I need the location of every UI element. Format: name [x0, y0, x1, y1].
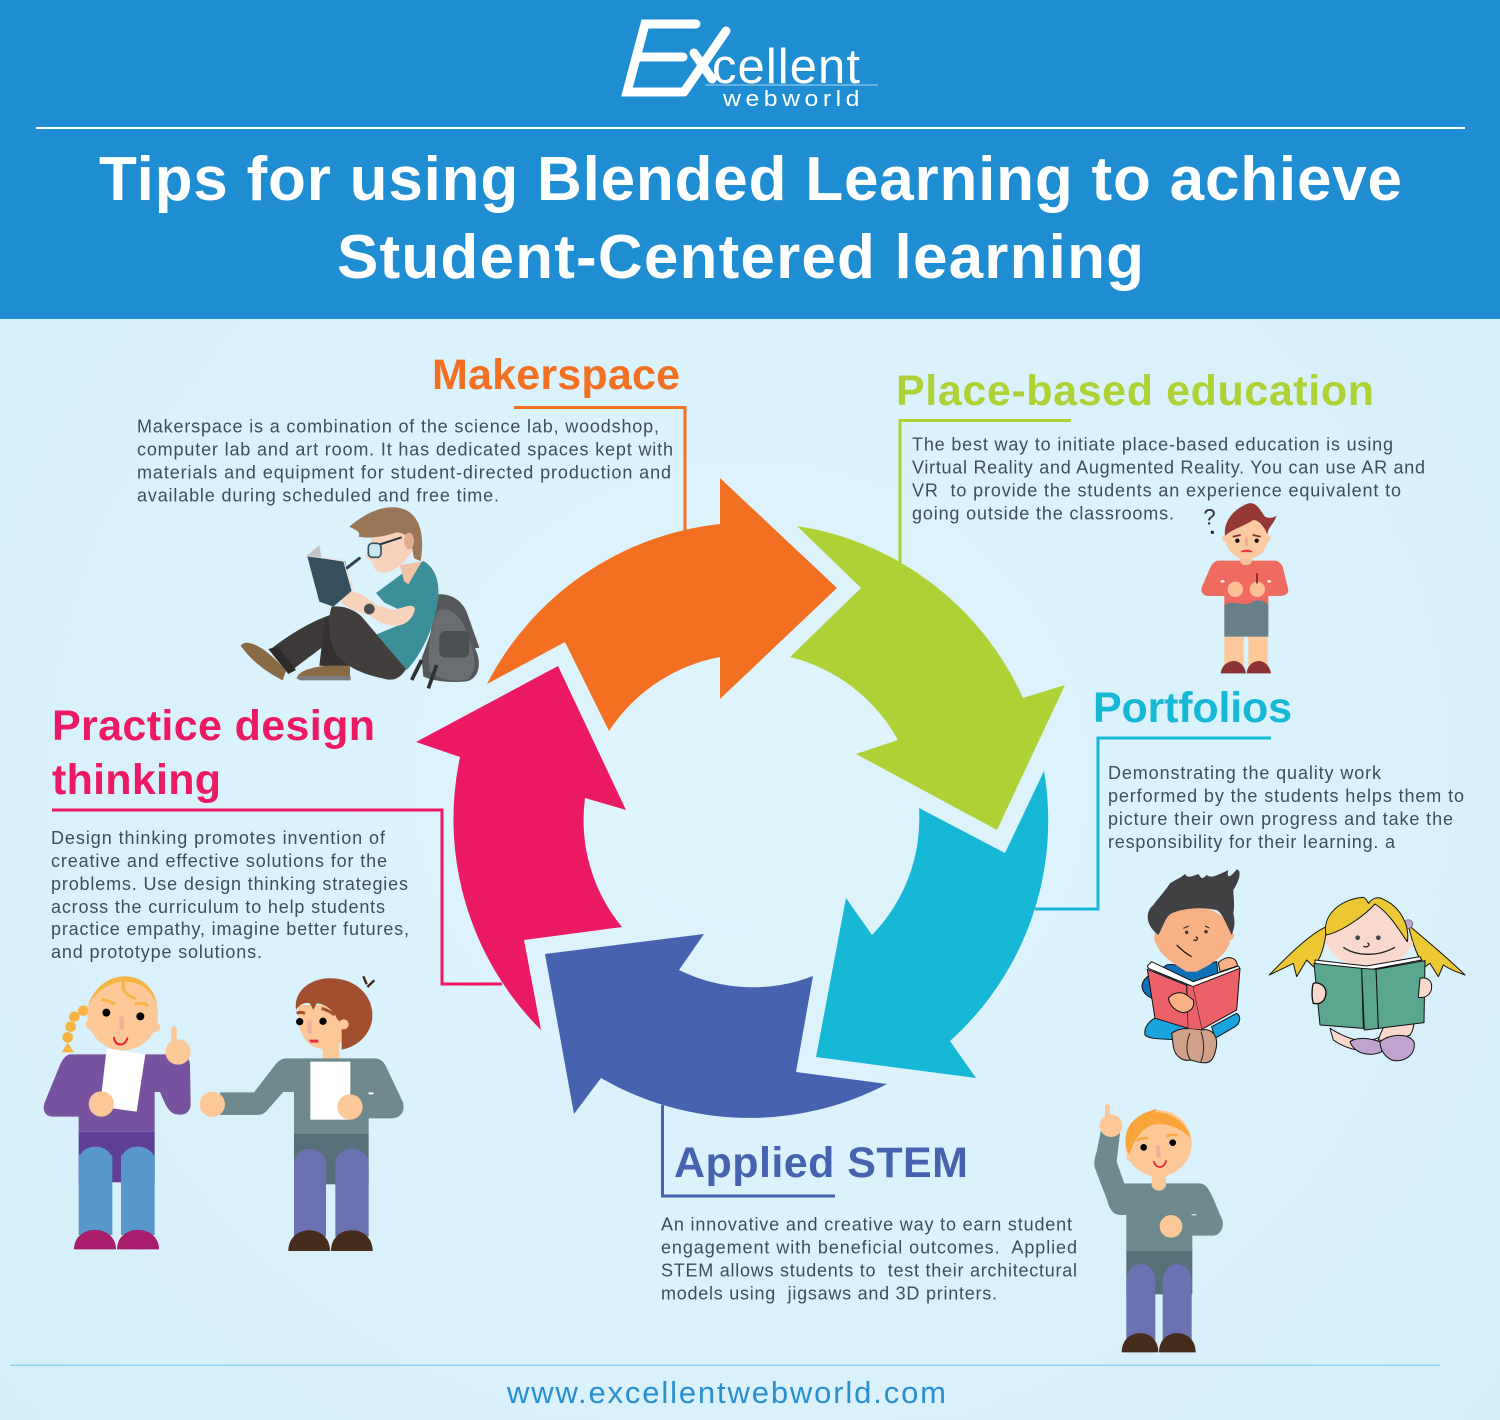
text: Portfolios [1108, 763, 1464, 852]
header band [0, 0, 1500, 319]
text: Portfolios: performed by the students helps them to [1108, 786, 1464, 806]
arrow: pink [416, 666, 626, 1030]
connector: Practice design thinking [52, 810, 502, 984]
title: Student-Centered learning [337, 223, 1144, 292]
boy reading red book [1142, 869, 1240, 1063]
logo: Excellent webworld: cellent [712, 40, 860, 94]
text: Applied STEM [661, 1214, 1077, 1304]
footer URL: www.excellentwebworld.com [506, 1375, 946, 1410]
heading: Practice design thinking: Practice design [52, 702, 375, 750]
text: Portfolios: responsibility for their learning. a [1108, 832, 1396, 852]
heading: Practice design thinking [52, 702, 375, 804]
illustration: student sketching with backpack [241, 507, 479, 688]
text: Applied STEM: STEM allows students to test their architectural [661, 1260, 1077, 1280]
title [99, 145, 1402, 292]
text: Makerspace: Makerspace is a combination of the science lab, woodshop, [137, 416, 659, 436]
arrow: green [790, 526, 1065, 830]
illustration: boy raising hand [1094, 1104, 1223, 1352]
text: Makerspace: materials and equipment for student-directed production and [137, 462, 671, 482]
text: Portfolios: picture their own progress and take the [1108, 809, 1453, 829]
logo: Excellent webworld [627, 24, 878, 111]
illustration: confused girl with question mark [1201, 503, 1288, 673]
text: Practice design thinking: practice empathy, imagine better futures, [51, 919, 409, 939]
text: Practice design thinking: Design thinking promotes invention of [51, 828, 386, 848]
text: Practice design thinking: across the curriculum to help students [51, 897, 385, 917]
title: Tips for using Blended Learning to achieve [99, 145, 1402, 214]
arrow: cyan [816, 771, 1048, 1078]
text: Applied STEM: models using jigsaws and 3D printers. [661, 1284, 997, 1304]
illustration: two children reading books [1142, 869, 1465, 1063]
text: Place-based education [912, 434, 1425, 524]
text: Practice design thinking: and prototype solutions. [51, 942, 262, 962]
girl with braid [44, 976, 191, 1249]
text: Place-based education: VR to provide the students an experience equivalent to [912, 480, 1401, 500]
connector: Portfolios [1035, 738, 1271, 909]
heading: Portfolios: Portfolios [1093, 684, 1292, 732]
text: Place-based education: going outside the classrooms. [912, 504, 1174, 524]
text: Makerspace [137, 416, 673, 506]
illustration: two people holding papers [44, 976, 404, 1251]
heading: Makerspace: Makerspace [432, 351, 680, 399]
logo: Excellent webworld: webworld [722, 86, 864, 111]
heading: Practice design thinking: thinking [52, 756, 221, 804]
text: Applied STEM: An innovative and creative way to earn student [661, 1214, 1072, 1234]
boy with brown hair [200, 976, 404, 1251]
arrow: orange [487, 478, 837, 731]
text: Makerspace: computer lab and art room. It has dedicated spaces kept with [137, 440, 673, 460]
text: Practice design thinking: creative and effective solutions for the [51, 851, 387, 871]
connector: Applied STEM [662, 1105, 835, 1196]
text: Place-based education: Virtual Reality and Augmented Reality. You can use AR and [912, 458, 1425, 478]
cycle diagram [416, 478, 1065, 1118]
text: Practice design thinking: problems. Use design thinking strategies [51, 874, 408, 894]
girl reading green book [1269, 897, 1465, 1061]
text: Place-based education: The best way to initiate place-based education is using [912, 434, 1393, 454]
connector: Makerspace [514, 408, 685, 532]
text: Makerspace: available during scheduled and free time. [137, 486, 499, 506]
footer rule [10, 1364, 1440, 1366]
illustration: confused girl with question mark: ? [1203, 504, 1216, 529]
heading: Applied STEM: Applied STEM [674, 1139, 968, 1187]
arrow: blue [545, 934, 887, 1118]
text: Practice design thinking [51, 828, 409, 962]
heading: Place-based education: Place-based education [896, 367, 1374, 415]
text: Portfolios: Demonstrating the quality work [1108, 763, 1382, 783]
text: Applied STEM: engagement with beneficial outcomes. Applied [661, 1238, 1077, 1258]
connector: Place-based education [900, 420, 1071, 568]
